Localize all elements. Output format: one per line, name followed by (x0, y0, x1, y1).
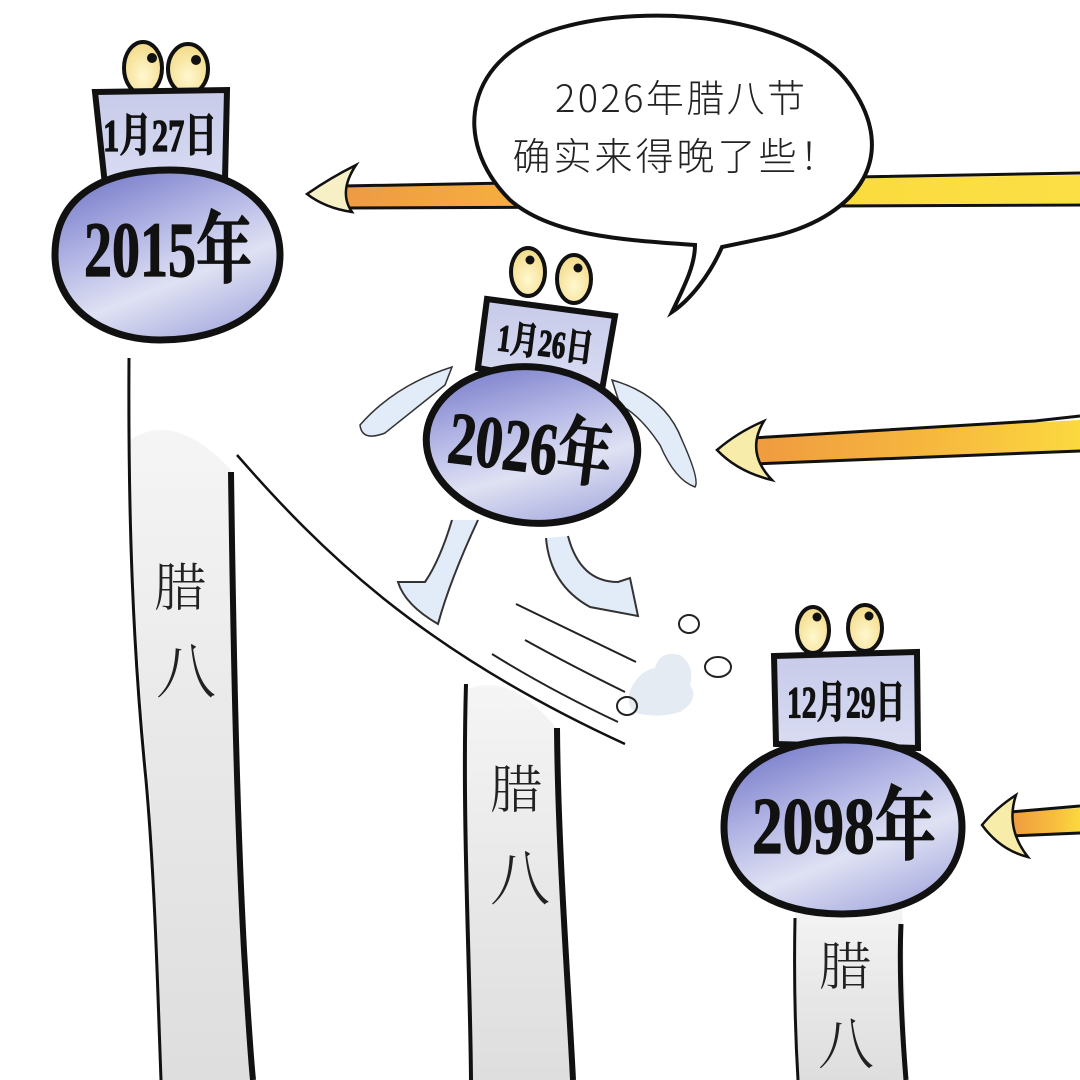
bubble text line 1: 2026年腊八节 (555, 68, 805, 123)
speech bubble (474, 16, 872, 312)
pillar label: 八 2026: 八 (490, 832, 550, 918)
pillar label: 八 2098: 八 (818, 1001, 874, 1080)
pillar: 2026 (465, 684, 573, 1080)
eyes (511, 248, 591, 303)
arms (360, 367, 696, 487)
body: 2015年 (84, 206, 252, 293)
pillar text 2026: 腊 (490, 748, 542, 823)
pillar text 2098: 腊 (819, 925, 871, 1000)
pillar label: 八 2015: 八 (156, 625, 216, 711)
date tag (95, 90, 227, 185)
body: 2098年 (752, 783, 936, 871)
arrow: middle arrow (717, 416, 1080, 480)
body (724, 740, 962, 914)
character: 2026 (360, 248, 696, 624)
arrow: top arrow (307, 165, 1080, 212)
bubble text line 2: 确实来得晚了些！ (512, 126, 838, 181)
legs (398, 520, 638, 624)
date tag (774, 652, 918, 748)
date tag: 12月29日 (787, 678, 905, 727)
body (55, 170, 280, 340)
body (418, 356, 646, 534)
date tag (478, 299, 615, 390)
pillar: 2015 (129, 358, 253, 1080)
arrow: bottom arrow (982, 795, 1080, 857)
date tag: 1月27日 (103, 110, 217, 161)
pillar: 2098 (795, 900, 907, 1080)
character: 2098 (724, 605, 962, 914)
date tag: 1月26日 (495, 317, 595, 371)
pillar text 2015: 腊 (154, 546, 206, 621)
eyes (124, 42, 208, 94)
body: 2026年 (444, 397, 617, 499)
curve: slope line (237, 455, 625, 744)
eyes (797, 605, 882, 653)
speed lines and dust cloud (492, 604, 731, 722)
character: 2015 (55, 42, 280, 340)
